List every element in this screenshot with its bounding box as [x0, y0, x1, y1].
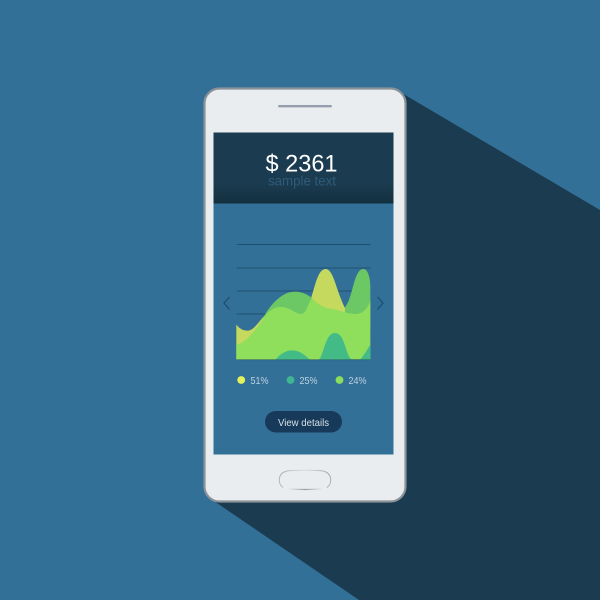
- phone body: [204, 88, 406, 502]
- yellow area: [236, 269, 346, 359]
- left arrow: [224, 297, 230, 310]
- light green area: [236, 298, 370, 359]
- legend: 25%: 25%: [300, 375, 318, 387]
- view details button: [265, 411, 342, 432]
- sample text: sample text: [268, 172, 336, 188]
- amount: $ 2361: [266, 150, 338, 178]
- dark green area: [263, 292, 312, 330]
- screen: [214, 132, 394, 454]
- right arrow: [378, 297, 383, 310]
- speaker: [278, 105, 332, 107]
- teal bumps: [276, 350, 310, 359]
- grid lines: [236, 244, 370, 360]
- phone: [204, 88, 406, 502]
- area chart: [236, 244, 370, 360]
- legend: 24%: 24%: [348, 375, 366, 387]
- long shadow: [208, 92, 600, 600]
- view details button: View details: [278, 417, 329, 429]
- header panel: [214, 132, 394, 204]
- legend: 51%: 51%: [250, 375, 268, 387]
- dark green peak: [345, 269, 370, 330]
- home button: [279, 470, 331, 489]
- legend: [237, 375, 366, 387]
